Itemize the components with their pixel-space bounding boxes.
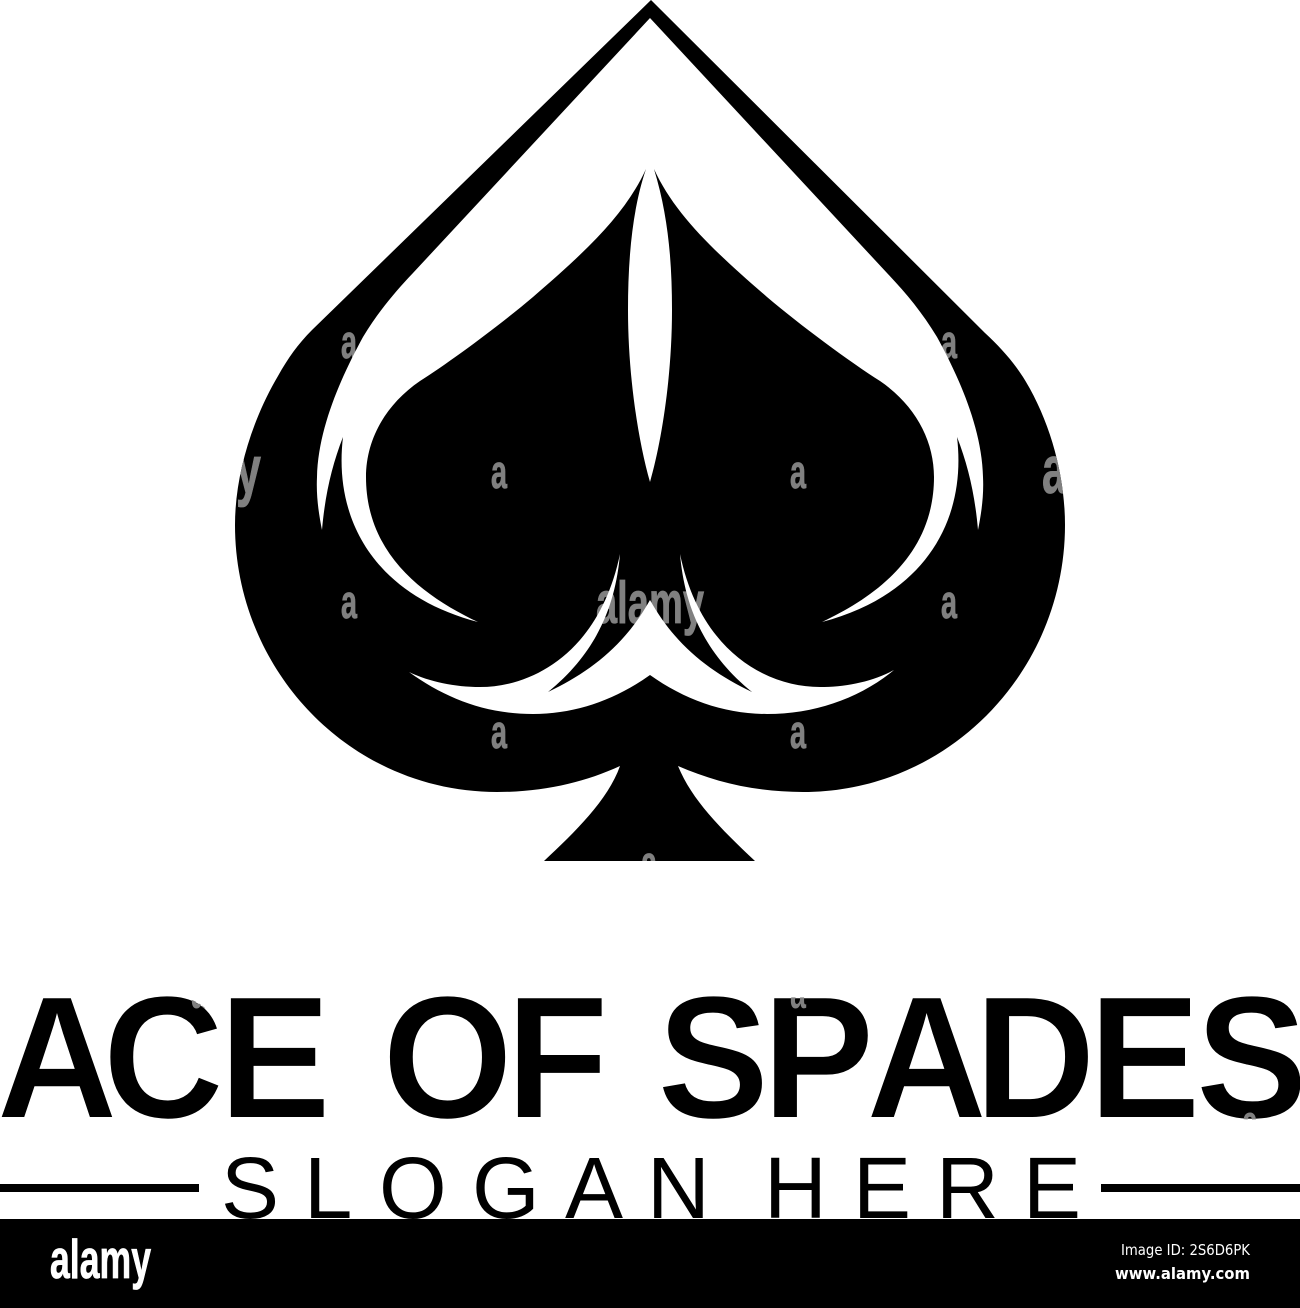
watermark letters on spade: a (941, 575, 958, 628)
watermark letters on spade: a (941, 315, 958, 368)
white lower swoosh (409, 554, 894, 714)
watermark marks inside title: a (1242, 1095, 1259, 1148)
spade outer silhouette (235, 0, 1065, 861)
watermark letters on spade: a (790, 705, 807, 758)
watermark letters on spade (236, 315, 1067, 889)
footer logo: alamy (50, 1228, 151, 1290)
icon: spade logo (235, 0, 1067, 889)
watermark letters on spade: a (491, 445, 508, 498)
watermark letters on spade: a (341, 575, 358, 628)
watermark letters on spade: y (236, 432, 261, 508)
watermark letters on spade: a (341, 315, 358, 368)
watermark letters on spade: a (641, 836, 658, 889)
left rule (0, 1184, 199, 1192)
slogan: SLOGAN HERE (221, 1140, 1081, 1237)
image id: Image ID: 2S6D6PK (1121, 1241, 1251, 1259)
right rule (1101, 1184, 1300, 1192)
watermark letters on spade: alamy (596, 570, 704, 636)
watermark marks inside title: a (191, 965, 208, 1018)
title: ACE OF SPADES (0, 961, 1300, 1156)
footer bar (0, 1219, 1300, 1308)
watermark letters on spade: a (790, 445, 807, 498)
watermark letters on spade: a (491, 705, 508, 758)
website: www.alamy.com (1115, 1264, 1250, 1283)
white inner shape with centre slit (317, 18, 983, 622)
watermark marks inside title: a (790, 965, 807, 1018)
watermark marks inside title (192, 997, 1256, 1120)
watermark letters on spade: a (1042, 432, 1067, 508)
